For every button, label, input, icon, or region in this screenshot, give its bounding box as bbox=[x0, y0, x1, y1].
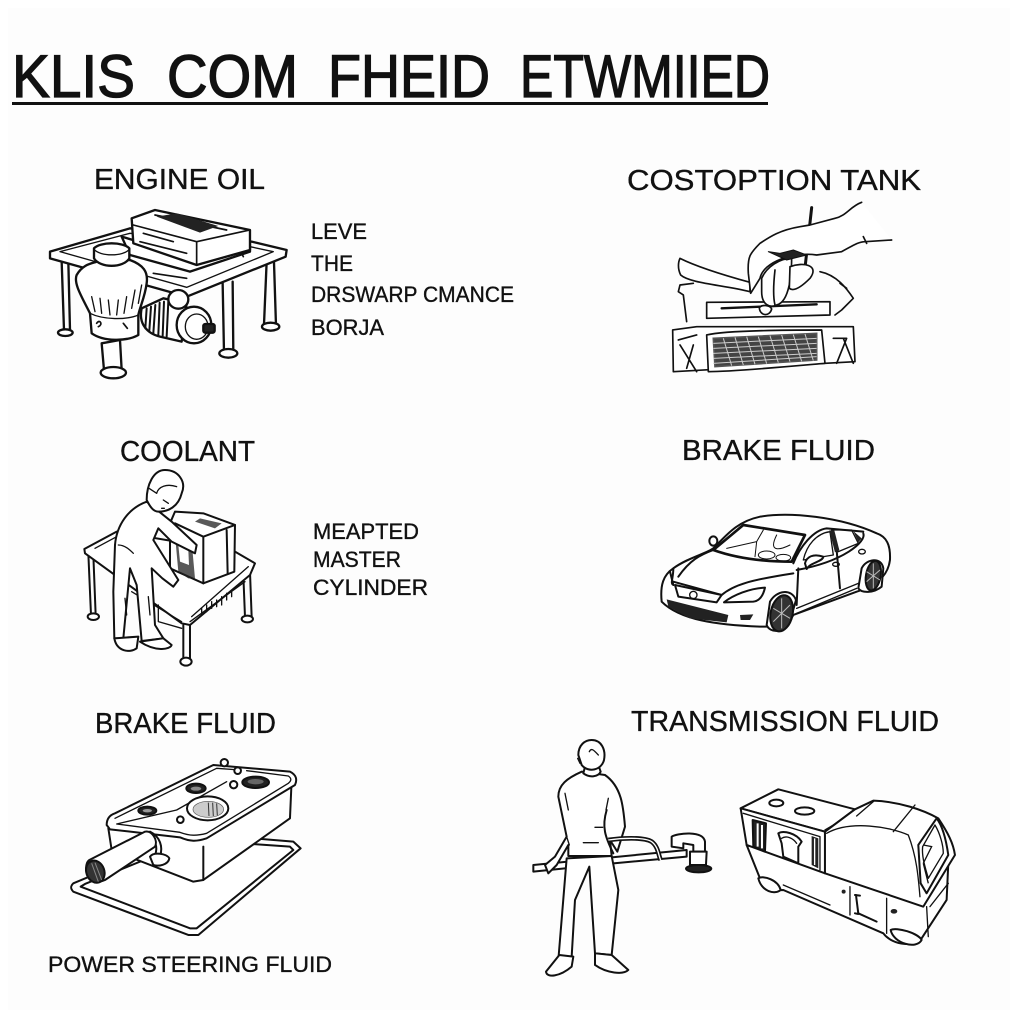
machine bbox=[741, 789, 955, 945]
icon: person with pump and machine bbox=[533, 740, 955, 976]
icon: reservoir on tray bbox=[71, 759, 301, 935]
icon: engine on table bbox=[50, 210, 287, 378]
text block: coolant notes: MEAPTED bbox=[313, 519, 419, 544]
panel: transmission fluid bbox=[533, 706, 955, 976]
text block: coolant notes bbox=[313, 519, 428, 600]
text block: engine oil notes: BORJA bbox=[311, 315, 384, 340]
text block: engine oil notes bbox=[311, 219, 514, 340]
title: ETWMIIED bbox=[520, 43, 770, 110]
heading: costoption tank: COSTOPTION TANK bbox=[627, 165, 922, 197]
panel: brake fluid reservoir bbox=[48, 708, 332, 977]
heading: coolant: COOLANT bbox=[120, 436, 255, 468]
heading: engine oil: ENGINE OIL bbox=[94, 164, 265, 196]
panel: brake fluid car bbox=[661, 435, 890, 634]
text block: engine oil notes: THE bbox=[311, 251, 353, 276]
icon: hand over tank bbox=[673, 202, 892, 372]
title: COM bbox=[167, 43, 298, 110]
text block: engine oil notes: LEVE bbox=[311, 219, 367, 244]
panel: coolant bbox=[84, 436, 428, 666]
panel: costoption tank bbox=[627, 165, 922, 372]
icon: person at table bbox=[84, 470, 255, 666]
title bbox=[12, 43, 770, 110]
text block: coolant notes: MASTER bbox=[313, 547, 401, 572]
text block: engine oil notes: DRSWARP CMANCE bbox=[311, 282, 514, 307]
icon: car bbox=[661, 515, 890, 634]
label: power steering fluid: POWER STEERING FLUID bbox=[48, 952, 332, 977]
heading: brake fluid: BRAKE FLUID bbox=[682, 435, 875, 467]
title: KLIS bbox=[12, 43, 135, 110]
heading: transmission fluid: TRANSMISSION FLUID bbox=[631, 706, 939, 738]
title: FHEID bbox=[328, 43, 490, 110]
text block: coolant notes: CYLINDER bbox=[313, 575, 428, 600]
panel: engine oil bbox=[50, 164, 514, 378]
heading: brake fluid: BRAKE FLUID bbox=[95, 708, 276, 740]
person with hose bbox=[533, 740, 711, 976]
